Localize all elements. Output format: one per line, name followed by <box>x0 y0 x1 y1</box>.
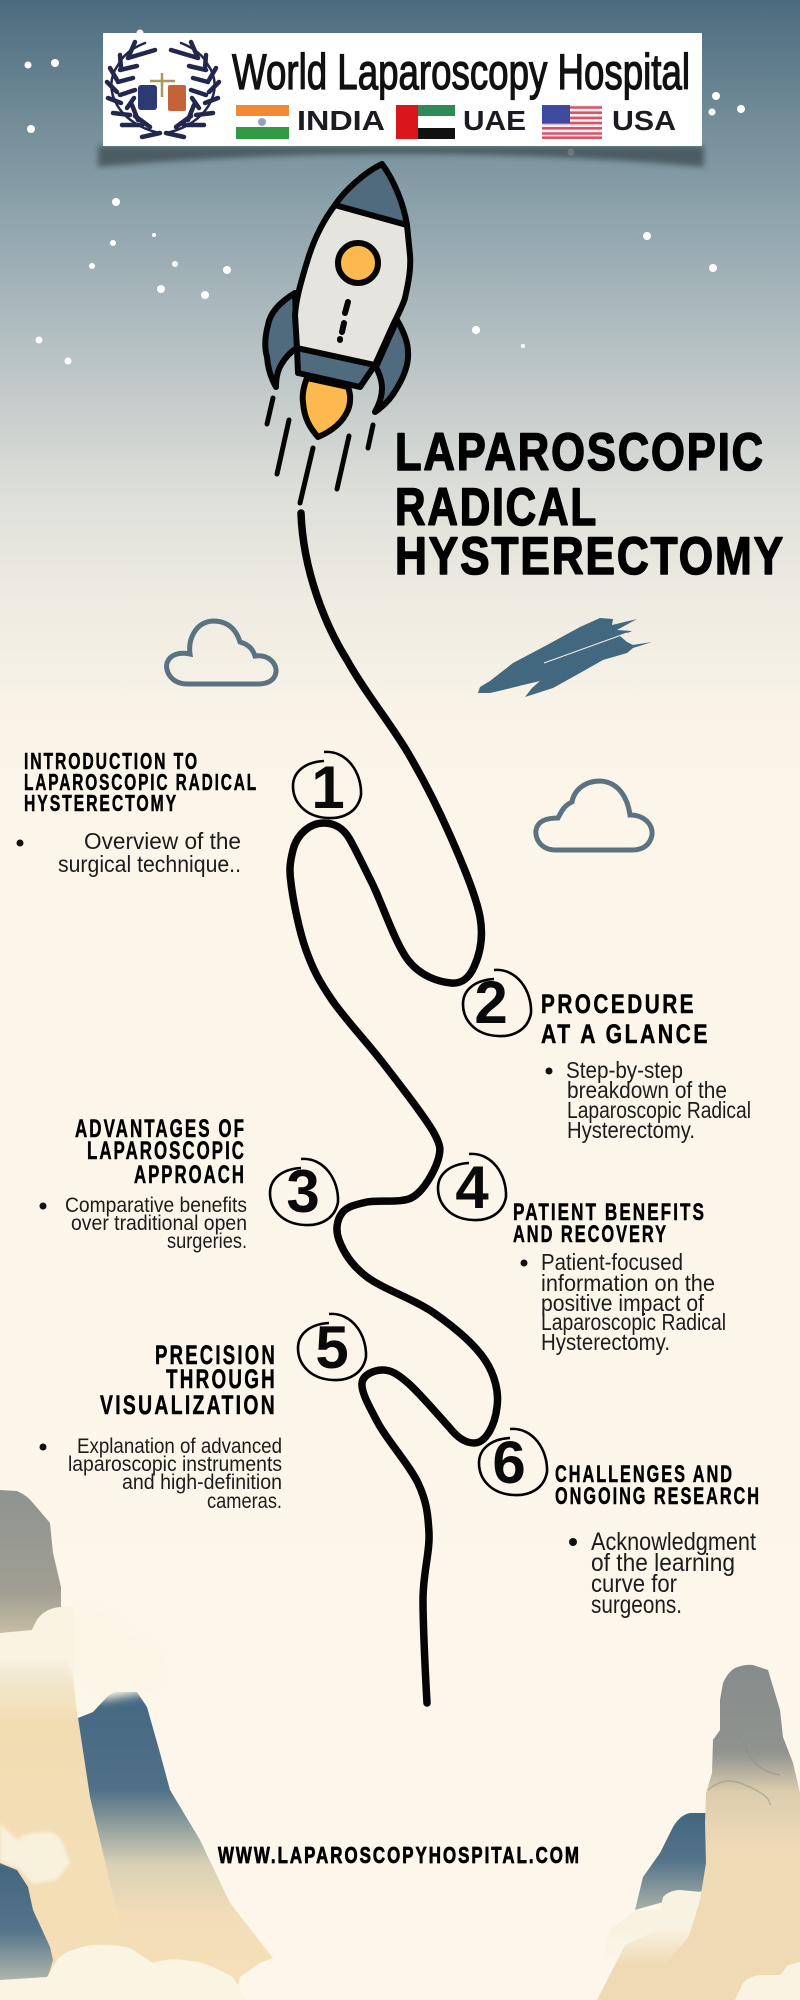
body text 3: Comparative benefits <box>65 1194 247 1217</box>
body text 6: of the learning <box>591 1549 735 1577</box>
heading 4: AND RECOVERY <box>513 1221 668 1248</box>
body text 5: Explanation of advanced <box>77 1435 282 1458</box>
number badge 2 <box>463 969 531 1036</box>
body text 5: and high-definition <box>122 1471 282 1494</box>
brush stroke <box>478 618 652 697</box>
label: UAE: UAE <box>463 105 526 136</box>
section 4: patient benefits <box>438 1154 726 1355</box>
right branch <box>166 42 219 137</box>
body text 2 <box>546 1057 751 1143</box>
body text 5 <box>40 1435 282 1513</box>
rocket body <box>295 205 410 365</box>
flag: UAE <box>396 105 455 139</box>
heading 5: VISUALIZATION <box>100 1390 277 1420</box>
heading 2 <box>541 989 710 1049</box>
heading 1: HYSTERECTOMY <box>24 790 178 816</box>
winding path line <box>290 513 498 1703</box>
rocket engine <box>297 348 375 387</box>
section 1: introduction <box>16 748 361 877</box>
body text 4: Laparoscopic Radical <box>541 1309 726 1335</box>
body text 4 <box>520 1249 726 1355</box>
number badge 1 <box>293 752 361 821</box>
body text 3: surgeries. <box>167 1230 247 1253</box>
number badge 4 <box>438 1154 506 1221</box>
left branch <box>107 42 160 137</box>
title: RADICAL <box>395 478 598 537</box>
heading 2: PROCEDURE <box>541 989 696 1019</box>
number badge 3 <box>270 1158 338 1225</box>
shields <box>138 85 157 110</box>
speed lines <box>267 398 373 503</box>
heading 1: LAPAROSCOPIC RADICAL <box>24 769 258 795</box>
heading 3 <box>75 1115 246 1189</box>
rocket right fin <box>375 320 408 412</box>
icon: cloud outline right <box>536 781 652 850</box>
heading 1 <box>24 748 258 816</box>
label: India: INDIA <box>297 105 385 136</box>
heading 5 <box>100 1340 277 1420</box>
body text 1 <box>16 828 241 877</box>
body text 6 <box>569 1528 756 1619</box>
body text 4: Hysterectomy. <box>541 1329 670 1355</box>
body text 5: cameras. <box>207 1490 282 1513</box>
banner shadow <box>98 146 704 167</box>
body text 6: curve for <box>591 1570 677 1598</box>
body text 1: Overview of the <box>84 828 241 854</box>
heading 3: ADVANTAGES OF <box>75 1115 246 1143</box>
flag: India <box>236 105 289 139</box>
icon: laurel wreath crest <box>107 42 219 137</box>
body text 4: information on the <box>541 1270 715 1296</box>
body text 4: positive impact of <box>541 1290 705 1316</box>
heading 1: INTRODUCTION TO <box>24 748 199 774</box>
body text 6: Acknowledgment <box>591 1528 756 1556</box>
section 2: procedure <box>463 969 751 1143</box>
body text 5: laparoscopic instruments <box>68 1453 282 1476</box>
heading 3: LAPAROSCOPIC <box>87 1137 246 1165</box>
number badge 5: 5 <box>315 1314 349 1381</box>
section 6: challenges <box>479 1429 761 1619</box>
mountains and clouds: right <box>597 1665 800 2000</box>
website footer: WWW.LAPAROSCOPYHOSPITAL.COM <box>218 1842 581 1868</box>
body text 1: surgical technique.. <box>58 851 241 877</box>
body text 6: surgeons. <box>591 1591 682 1619</box>
heading 5: THROUGH <box>166 1364 277 1394</box>
body text 2: Step-by-step <box>566 1057 683 1083</box>
number badge 3: 3 <box>286 1158 320 1225</box>
number badge 1: 1 <box>311 754 345 821</box>
heading 5: PRECISION <box>155 1340 277 1370</box>
heading 3: APPROACH <box>134 1161 246 1189</box>
body text 3: over traditional open <box>71 1212 247 1235</box>
number badge 6: 6 <box>492 1429 526 1496</box>
title <box>395 423 785 586</box>
body text 3 <box>40 1194 247 1253</box>
body text 2: breakdown of the <box>567 1077 727 1103</box>
rocket window <box>338 243 378 283</box>
logo banner <box>98 33 704 167</box>
heading 4: PATIENT BENEFITS <box>513 1199 706 1226</box>
label: USA: USA <box>612 105 676 136</box>
icon: cloud outline left <box>167 621 276 684</box>
rocket dashes <box>340 302 348 340</box>
heading 4 <box>513 1199 706 1248</box>
icon: rocket <box>265 164 410 503</box>
number badge 5 <box>298 1314 366 1381</box>
rocket left fin <box>265 293 297 387</box>
body text 2: Hysterectomy. <box>567 1117 695 1143</box>
number badge 4: 4 <box>455 1154 489 1221</box>
rocket flame <box>303 378 350 437</box>
banner panel <box>103 33 702 146</box>
cross <box>150 73 175 97</box>
section 5: precision <box>40 1314 366 1513</box>
number badge 2: 2 <box>474 969 508 1036</box>
section 3: advantages <box>40 1115 338 1253</box>
body text 2: Laparoscopic Radical <box>567 1097 751 1123</box>
stars <box>24 30 745 364</box>
body text 4: Patient-focused <box>541 1249 683 1275</box>
rocket nose cone <box>335 164 407 225</box>
flag: USA <box>542 105 602 139</box>
number badge 6 <box>479 1429 547 1496</box>
mountains and clouds: left <box>0 1490 273 2000</box>
heading 6 <box>555 1461 761 1510</box>
heading 2: AT A GLANCE <box>541 1019 710 1049</box>
